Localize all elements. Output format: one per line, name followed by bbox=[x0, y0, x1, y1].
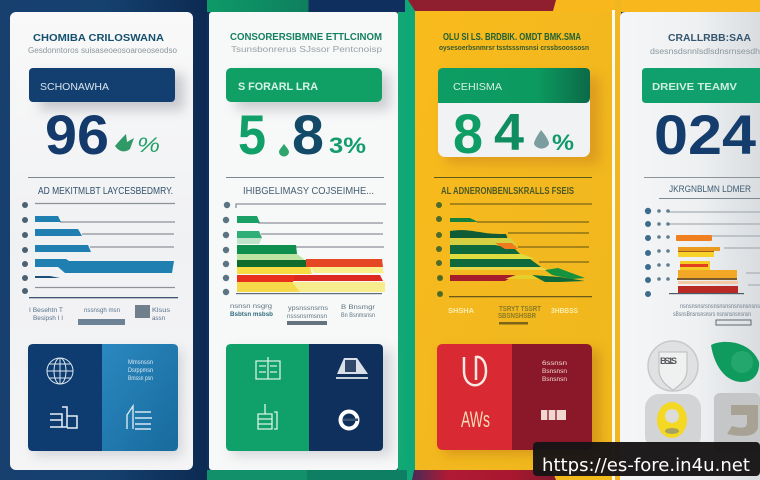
big numbers: 8 bbox=[292, 103, 324, 166]
big number: 96 bbox=[45, 103, 109, 166]
label bar bbox=[642, 68, 760, 103]
icon card text: Bmssn psn bbox=[128, 376, 153, 382]
label bar bbox=[226, 68, 382, 102]
icon: building bbox=[127, 406, 152, 429]
chart footer labels: SBSNSHSBR bbox=[498, 313, 536, 320]
label bar: DREIVE TEAMV bbox=[652, 82, 737, 93]
icon: stacked containers bbox=[258, 404, 277, 429]
icon: silver shield badge bbox=[648, 341, 698, 391]
icon: book bbox=[256, 357, 280, 379]
chart footer labels bbox=[230, 304, 375, 325]
chart footer labels: B Bnsmgr bbox=[341, 305, 375, 311]
chart footer labels: ypsnssnsrns bbox=[288, 306, 328, 312]
bar chart bbox=[645, 198, 760, 297]
icon: water drop bbox=[534, 130, 549, 149]
chart footer labels: 3HBBSS bbox=[551, 308, 578, 315]
chart footer labels: nsnsn nsgrg bbox=[230, 304, 272, 310]
big numbers: 8 bbox=[453, 102, 483, 165]
chart heading: IHIBGELIMASY COJSEIMHE... bbox=[243, 185, 374, 197]
chart footer labels: nssnsgh msn bbox=[84, 308, 120, 314]
background: yellow column bbox=[415, 0, 613, 480]
big numbers: 5 bbox=[238, 103, 266, 166]
card lines: Bsnsnsn bbox=[542, 368, 567, 375]
background: top right yellow strip bbox=[556, 0, 760, 12]
icon card bbox=[28, 344, 182, 456]
watermark bbox=[533, 442, 760, 476]
background: top strip green and navy bbox=[207, 0, 412, 12]
background: green edge of second column bbox=[398, 0, 416, 480]
icon card bbox=[226, 344, 392, 456]
icon: archive box bbox=[336, 358, 368, 378]
icon: yellow ring tile bbox=[645, 394, 701, 450]
label bar: SCHONAWHA bbox=[40, 81, 109, 93]
chart footer labels: Klsus bbox=[152, 308, 170, 314]
bar chart bbox=[22, 202, 178, 298]
icon: boxes bbox=[541, 410, 566, 420]
stat card: 4 bbox=[494, 104, 524, 162]
background: bottom strip green bbox=[207, 470, 407, 480]
big numbers bbox=[238, 103, 324, 166]
chart divider bbox=[434, 177, 592, 178]
chart heading: AD MEKITMLBT LAYCESBEDMRY. bbox=[38, 185, 173, 197]
icon: leaf bbox=[115, 134, 134, 151]
chart footer labels: assn bbox=[152, 316, 165, 322]
chart divider bbox=[28, 177, 175, 178]
panel: right partial card bbox=[620, 12, 760, 480]
heading: CONSORERSIBMNE ETTLCINOM bbox=[230, 32, 382, 43]
background: top red strip bbox=[408, 0, 556, 11]
bar shadow bbox=[236, 74, 390, 110]
chart footer labels: Besipsh I I bbox=[33, 316, 63, 322]
chart footer labels bbox=[673, 304, 760, 325]
percent value: 3% bbox=[329, 133, 366, 158]
bar chart bbox=[223, 202, 386, 295]
big numbers: 024 bbox=[654, 103, 756, 166]
chart divider bbox=[226, 177, 384, 178]
heading: CRALLRBB:SAA bbox=[668, 33, 751, 44]
chart footer labels bbox=[29, 305, 170, 325]
chart footer labels: Bsbtsn msbsb bbox=[230, 312, 273, 318]
chart heading: AL ADNERONBENLSKRALLS FSEIS bbox=[441, 185, 574, 197]
icon card text bbox=[128, 360, 153, 382]
watermark: https://es-fore.in4u.net bbox=[542, 455, 750, 476]
heading: CHOMIBA CRILOSWANA bbox=[33, 32, 164, 44]
label bar: S FORARL LRA bbox=[238, 81, 318, 93]
chart footer labels: I Besehtn T bbox=[29, 308, 63, 314]
icon card text: Dsrppmsn bbox=[128, 368, 153, 374]
background: yellow and white stripes bbox=[612, 0, 621, 480]
background: bottom red strip bbox=[412, 470, 556, 480]
card lines: Bsnsnsn bbox=[542, 376, 567, 383]
icon card bbox=[437, 344, 600, 454]
icon: ring bbox=[340, 412, 358, 428]
icon: water drop bbox=[279, 144, 289, 156]
label: CEHISMA bbox=[453, 81, 502, 93]
label bar bbox=[29, 68, 175, 102]
card shadow bbox=[446, 76, 600, 164]
chart footer labels bbox=[448, 306, 578, 324]
panel: yellow column content bbox=[434, 32, 600, 454]
icon: factory bbox=[50, 407, 77, 428]
icon: silver shield badge: BS1 S bbox=[660, 356, 677, 366]
icon: globe bbox=[47, 358, 73, 384]
stat card bbox=[438, 68, 590, 165]
bar shadow bbox=[40, 74, 184, 110]
icon card text: Mmsnssn bbox=[128, 360, 153, 366]
subheading: oysesoerbsnmrsr tsstsssmsnsi crssbsoossosn bbox=[439, 43, 589, 52]
icon: metal number tile bbox=[714, 393, 760, 451]
chart divider bbox=[644, 177, 760, 178]
icon: letter U bbox=[464, 357, 486, 385]
chart footer labels: TSRYT TSSRT bbox=[499, 306, 542, 313]
chart footer labels: SHSHA bbox=[448, 308, 474, 315]
subheading: Tsunsbonrerus SJssor Pentcnoisp bbox=[231, 45, 383, 54]
card lines: 6ssnsn bbox=[542, 360, 567, 367]
icon text: AWs bbox=[461, 407, 490, 432]
percent sign: % bbox=[552, 130, 574, 155]
percent sign: % bbox=[137, 134, 160, 157]
chart footer labels: nsssnsrmsnsn bbox=[287, 314, 327, 320]
heading: OLU SI LS. BRDBIK. OMDT BMK.SMA bbox=[443, 32, 581, 43]
panel: green column card bbox=[209, 12, 398, 470]
chart footer labels: Bn Bsnmsnsn bbox=[341, 313, 375, 319]
background: left sliver of second column bbox=[207, 12, 210, 470]
subheading: Gesdonntoros suisaseoeosoaroeoseodso bbox=[28, 46, 178, 55]
background: navy column bbox=[0, 0, 208, 480]
area chart bbox=[436, 202, 592, 297]
card lines bbox=[542, 360, 567, 383]
panel: navy column card bbox=[10, 12, 193, 470]
icon: green leaf badge bbox=[711, 342, 759, 382]
subheading: dsesnsdsnnlsdlsdnsrnsesdh bbox=[650, 47, 760, 56]
